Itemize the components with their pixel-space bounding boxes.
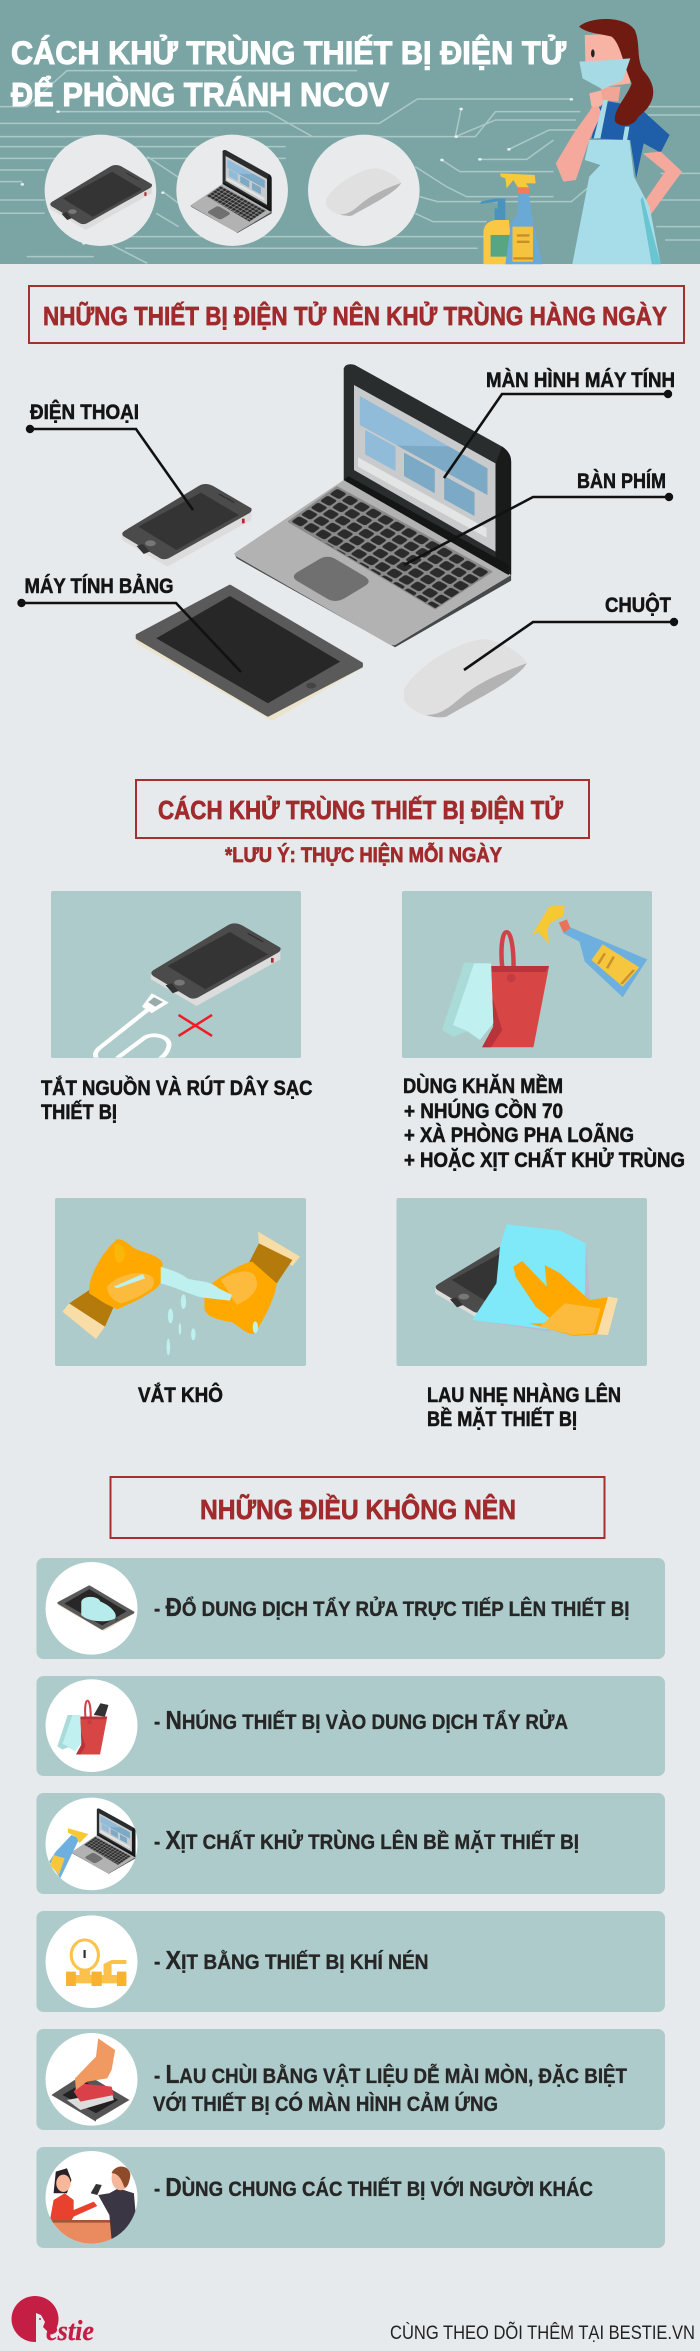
icon: spray bottle (500, 173, 542, 264)
title: CÁCH KHỬ TRÙNG THIẾT BỊ ĐIỆN TỬ (11, 35, 566, 71)
row text: - NHÚNG THIẾT BỊ VÀO DUNG DỊCH TẨY RỬA (154, 1705, 568, 1735)
label: phone: ĐIỆN THOẠI (30, 400, 139, 424)
icon: laptop (234, 364, 511, 647)
label: tablet (17, 575, 241, 672)
row 6 (36, 2147, 665, 2248)
step 1 card (51, 891, 301, 1060)
icon: phone circle (45, 135, 156, 246)
section heading: how to disinfect (136, 780, 589, 838)
icon: bucket (46, 1679, 137, 1772)
header banner (0, 0, 700, 264)
label: keyboard: BÀN PHÍM (577, 470, 666, 493)
icon: tablet (136, 586, 362, 721)
row text: - DÙNG CHUNG CÁC THIẾT BỊ VỚI NGƯỜI KHÁC (154, 2172, 593, 2202)
device diagram (17, 364, 678, 721)
label: mouse (464, 593, 678, 670)
section heading: what not to do (110, 1477, 604, 1538)
device illustrations (122, 364, 527, 721)
step 1 text: THIẾT BỊ (41, 1101, 117, 1124)
title (11, 35, 566, 113)
title: ĐỂ PHÒNG TRÁNH NCOV (11, 76, 389, 113)
step 3 text: VẮT KHÔ (138, 1383, 223, 1407)
section heading: how to disinfect: CÁCH KHỬ TRÙNG THIẾT BỊ ĐIỆN TỬ (158, 794, 563, 825)
icon: mouse (404, 639, 527, 717)
note: *LƯU Ý: THỰC HIỆN MỖI NGÀY (225, 843, 502, 867)
icon: red cross (179, 1015, 212, 1036)
woman and cleaning bottles illustration (480, 19, 682, 264)
label: screen: MÀN HÌNH MÁY TÍNH (486, 369, 675, 392)
step 4 card (396, 1198, 647, 1366)
icon: hand scrubbing tablet (46, 2033, 137, 2126)
icon: pressure gauge (46, 1915, 137, 2008)
step 3 card (55, 1198, 306, 1366)
icon: soap bottle (480, 199, 513, 264)
step 2 text: + XÀ PHÒNG PHA LOÃNG (404, 1123, 634, 1147)
icon: bucket and towel (442, 932, 549, 1047)
step 2 text: + NHÚNG CỒN 70 (404, 1099, 563, 1123)
section heading: devices to disinfect (29, 286, 684, 343)
section heading: what not to do: NHỮNG ĐIỀU KHÔNG NÊN (200, 1493, 516, 1525)
step 4 text: LAU NHẸ NHÀNG LÊN (427, 1383, 621, 1407)
row text: - XỊT CHẤT KHỬ TRÙNG LÊN BỀ MẶT THIẾT BỊ (154, 1825, 579, 1855)
device circles (45, 135, 420, 246)
row text: - XỊT BẰNG THIẾT BỊ KHÍ NÉN (154, 1945, 428, 1975)
step 2 text: DÙNG KHĂN MỀM (403, 1074, 563, 1098)
step 2 text (403, 1074, 685, 1172)
row 1 (36, 1558, 665, 1659)
step 4 text (427, 1383, 621, 1431)
row text: - LAU CHÙI BẰNG VẬT LIỆU DỄ MÀI MÒN, ĐẶC BIỆT (154, 2059, 627, 2089)
label: tablet: MÁY TÍNH BẢNG (24, 575, 174, 598)
icon: spray bottle (531, 905, 647, 997)
row 5 (36, 2029, 665, 2130)
icon: two people sharing a phone (45, 2151, 137, 2247)
label: keyboard (404, 470, 673, 565)
label: mouse: CHUỘT (605, 593, 671, 617)
row text: - ĐỔ DUNG DỊCH TẨY RỬA TRỰC TIẾP LÊN THIẾT BỊ (154, 1592, 630, 1622)
label: phone (26, 400, 193, 510)
icon: unplugged phone and cable (95, 923, 281, 1060)
icon: phone (122, 484, 252, 567)
icon: mouse circle (308, 135, 420, 246)
woman (556, 19, 682, 264)
icon: gloved hands wringing towel (62, 1232, 300, 1355)
step 2 card (402, 891, 652, 1058)
logo: Bestie (12, 2296, 94, 2347)
icon: liquid on tablet (46, 1562, 137, 1655)
icon: laptop circle (176, 135, 288, 246)
step 1 text: TẮT NGUỒN VÀ RÚT DÂY SẠC (41, 1076, 312, 1100)
icon: hand wiping phone with towel (435, 1224, 618, 1336)
row text (153, 2059, 627, 2116)
label: screen (444, 369, 675, 478)
row 3 (36, 1793, 665, 1894)
step 4 text: BỀ MẶT THIẾT BỊ (427, 1408, 577, 1431)
row 2 (36, 1676, 665, 1776)
icon: spray on laptop (46, 1798, 137, 1890)
row 4 (36, 1911, 665, 2012)
row text: VỚI THIẾT BỊ CÓ MÀN HÌNH CẢM ỨNG (153, 2091, 498, 2116)
circuit board pattern (0, 71, 700, 263)
logo: Bestie: estie (46, 2316, 94, 2347)
step 1 text (41, 1076, 312, 1124)
